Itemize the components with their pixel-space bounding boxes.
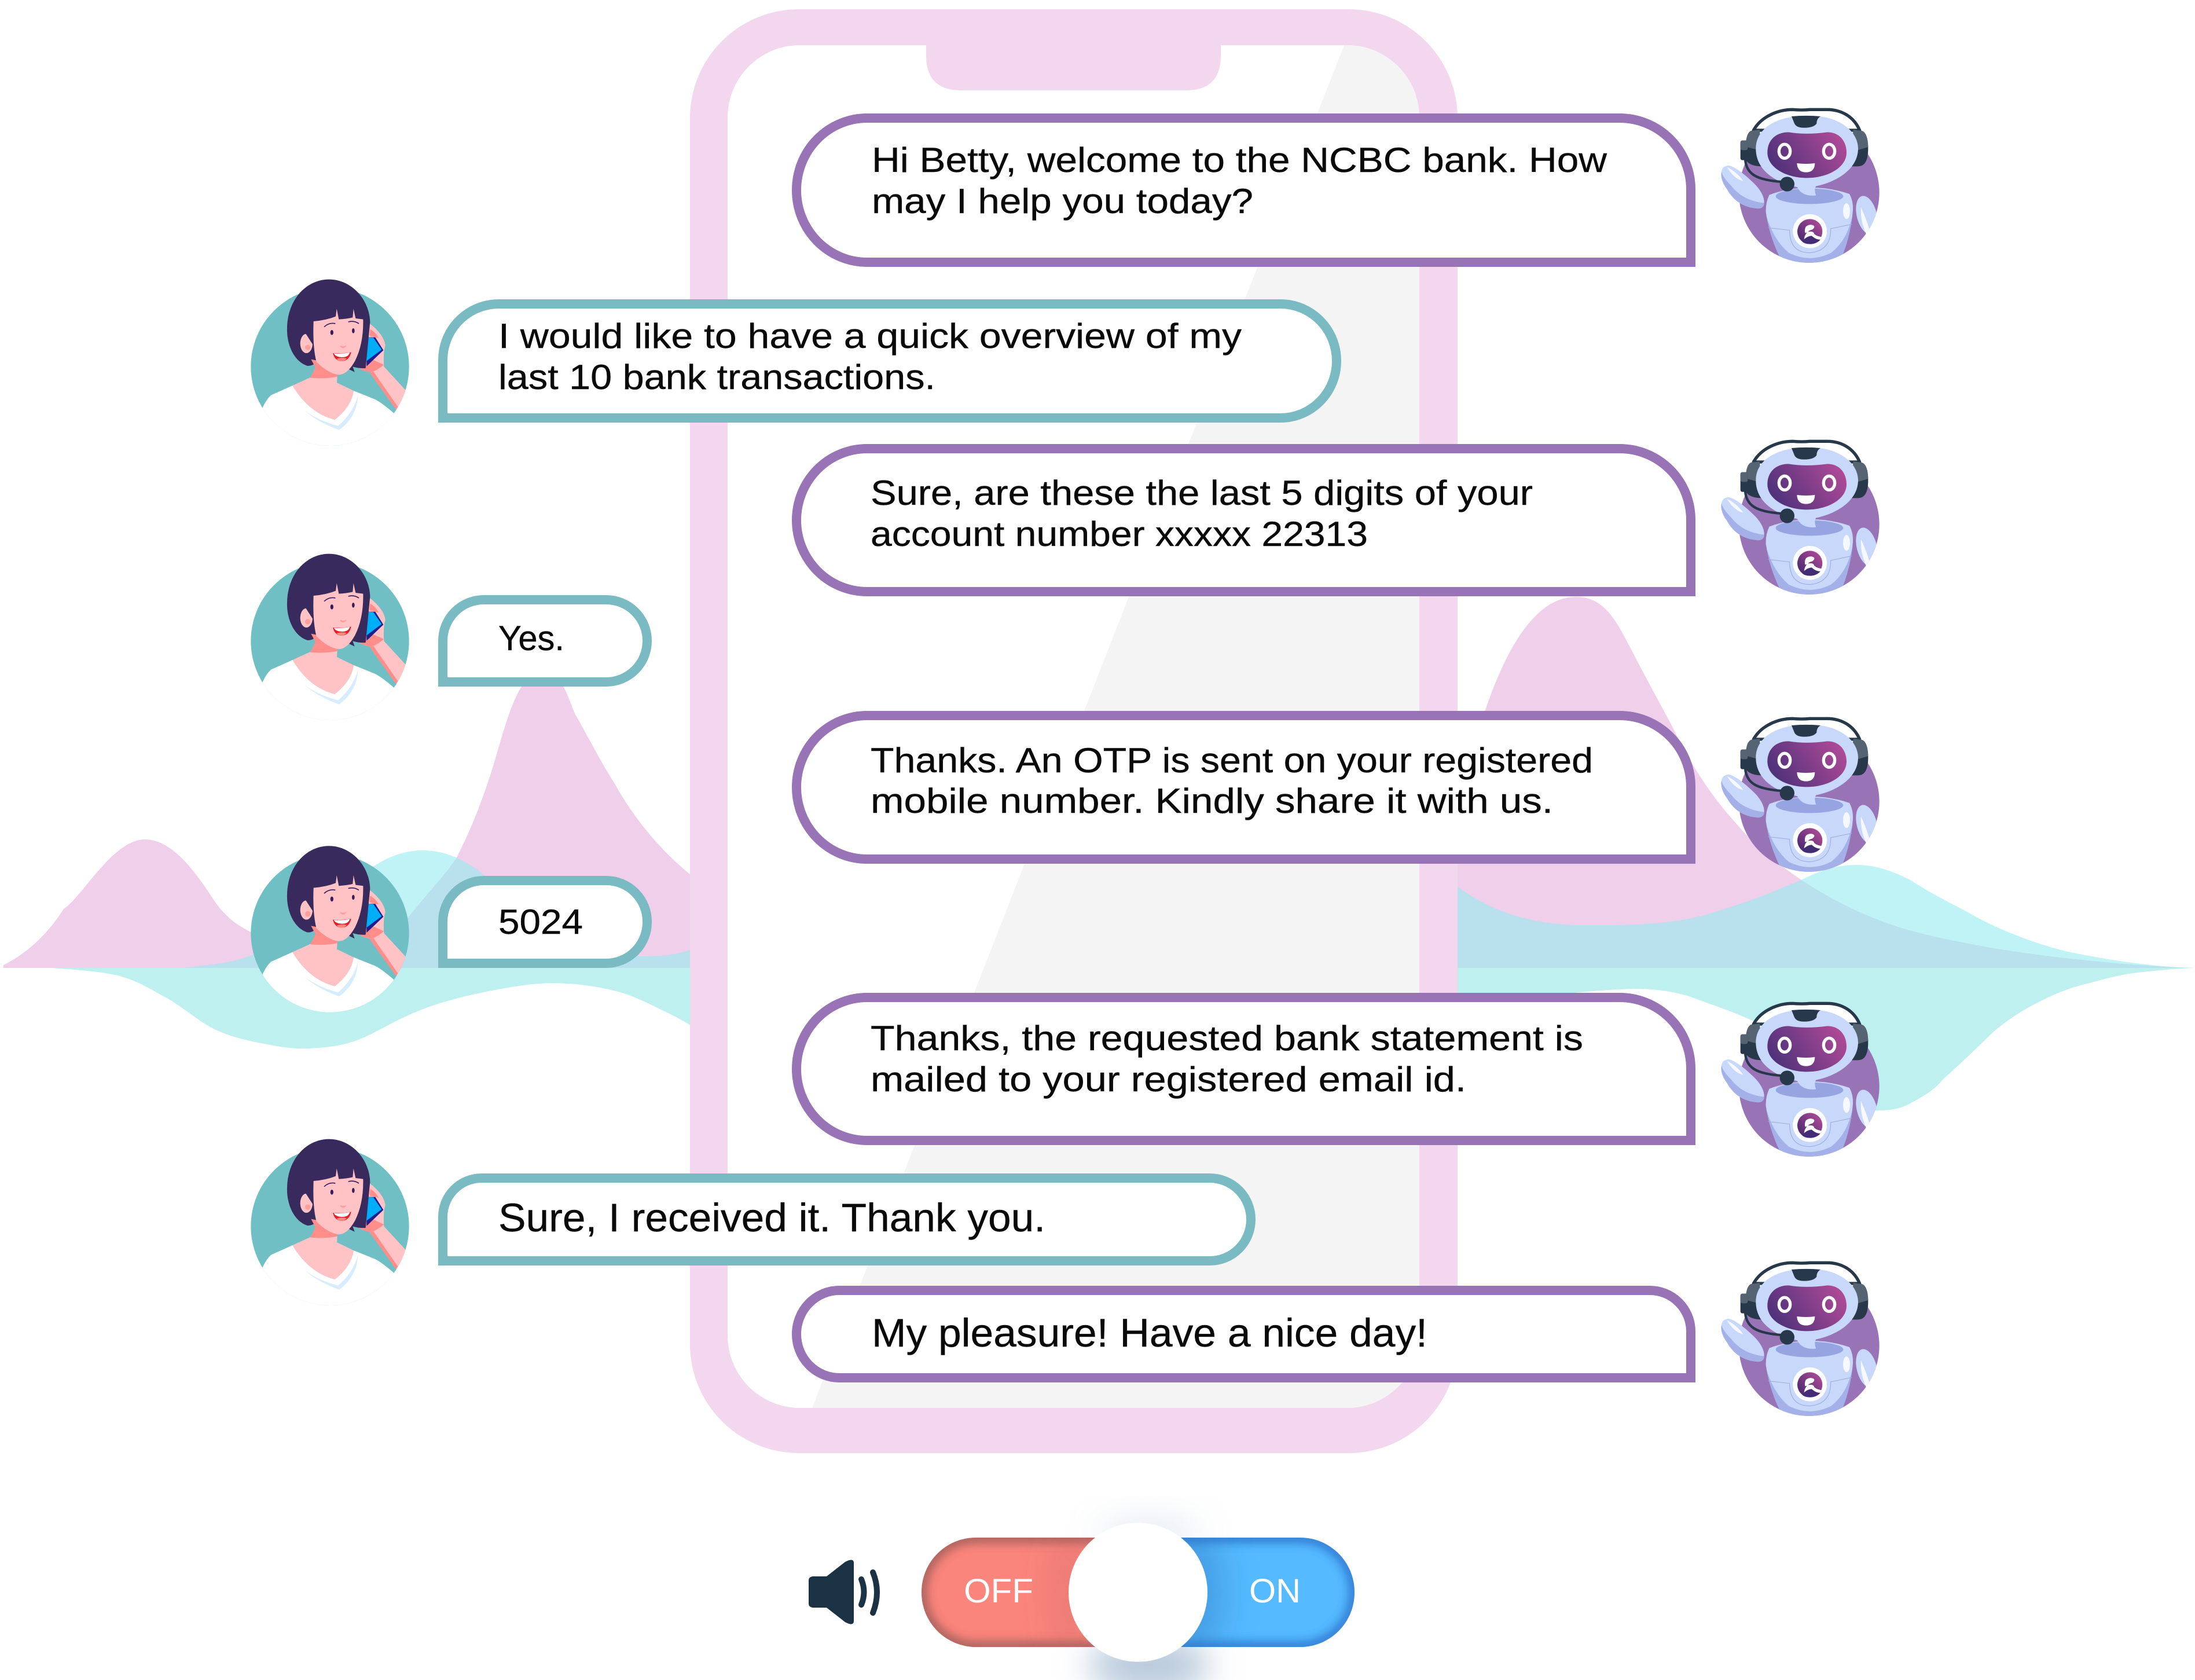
toggle: off label: OFF — [964, 1572, 1033, 1610]
phone — [690, 9, 1458, 1453]
bot statement text: mailed to your registered email id. — [871, 1060, 1466, 1099]
avatar: customer 2 — [251, 554, 409, 726]
bot OTP text: mobile number. Kindly share it with us. — [871, 782, 1553, 820]
wave: upper pink — [3, 597, 2195, 968]
avatar: customer 1 — [251, 280, 409, 452]
phone frame — [690, 9, 1458, 1453]
bot greeting text — [872, 141, 1607, 221]
bubble: customer thanks — [443, 1178, 1251, 1261]
toggle: knob — [1069, 1523, 1207, 1661]
icon: speaker — [809, 1560, 877, 1624]
bot account check text: Sure, are these the last 5 digits of your — [871, 474, 1533, 512]
toggle switch — [922, 1517, 1355, 1680]
avatar: bot 1 — [1721, 109, 1881, 263]
bubble: bot greeting — [796, 118, 1691, 262]
bubble: customer OTP — [443, 881, 647, 963]
bot greeting text: may I help you today? — [872, 182, 1253, 221]
customer thanks text: Sure, I received it. Thank you. — [498, 1195, 1045, 1240]
avatar: customer 4 — [251, 1139, 409, 1311]
toggle: knob shadow — [1088, 1636, 1210, 1680]
customer request text: I would like to have a quick overview of my — [498, 317, 1242, 355]
avatar: bot 4 — [1721, 1003, 1881, 1157]
toggle: on label: ON — [1249, 1572, 1301, 1610]
avatar: bot 2 — [1721, 441, 1881, 595]
bot statement text: Thanks, the requested bank statement is — [871, 1019, 1583, 1058]
bot account check text — [871, 474, 1533, 553]
avatar: customer 3 — [251, 846, 409, 1018]
bot greeting text: Hi Betty, welcome to the NCBC bank. How — [872, 141, 1607, 179]
customer OTP text: 5024 — [498, 903, 583, 941]
bot OTP text — [871, 741, 1593, 820]
bot goodbye text: My pleasure! Have a nice day! — [872, 1311, 1427, 1355]
bubble: customer request — [443, 304, 1337, 418]
customer request text — [498, 317, 1242, 397]
customer yes text: Yes. — [498, 619, 564, 658]
bubble: bot account check — [796, 449, 1691, 592]
avatar: bot 5 — [1721, 1263, 1881, 1417]
customer request text: last 10 bank transactions. — [498, 358, 935, 397]
bot account check text: account number xxxxx 22313 — [871, 515, 1368, 553]
wave: lower cyan left — [53, 968, 695, 1048]
wave: lower cyan right — [1447, 968, 2195, 1110]
bubble: bot OTP — [796, 716, 1691, 859]
bubble: customer yes — [443, 600, 647, 682]
phone notch — [926, 45, 1221, 90]
avatar: bot 3 — [1721, 718, 1881, 872]
screen shading — [812, 45, 1419, 1408]
toggle: track — [922, 1538, 1355, 1647]
bubble: bot statement — [796, 997, 1691, 1140]
sound waves — [3, 597, 2195, 1110]
wave: upper cyan — [182, 850, 2195, 968]
phone screen — [728, 45, 1419, 1408]
bot OTP text: Thanks. An OTP is sent on your registered — [871, 741, 1593, 780]
bot statement text — [871, 1019, 1583, 1099]
bubble: bot goodbye — [796, 1290, 1691, 1378]
